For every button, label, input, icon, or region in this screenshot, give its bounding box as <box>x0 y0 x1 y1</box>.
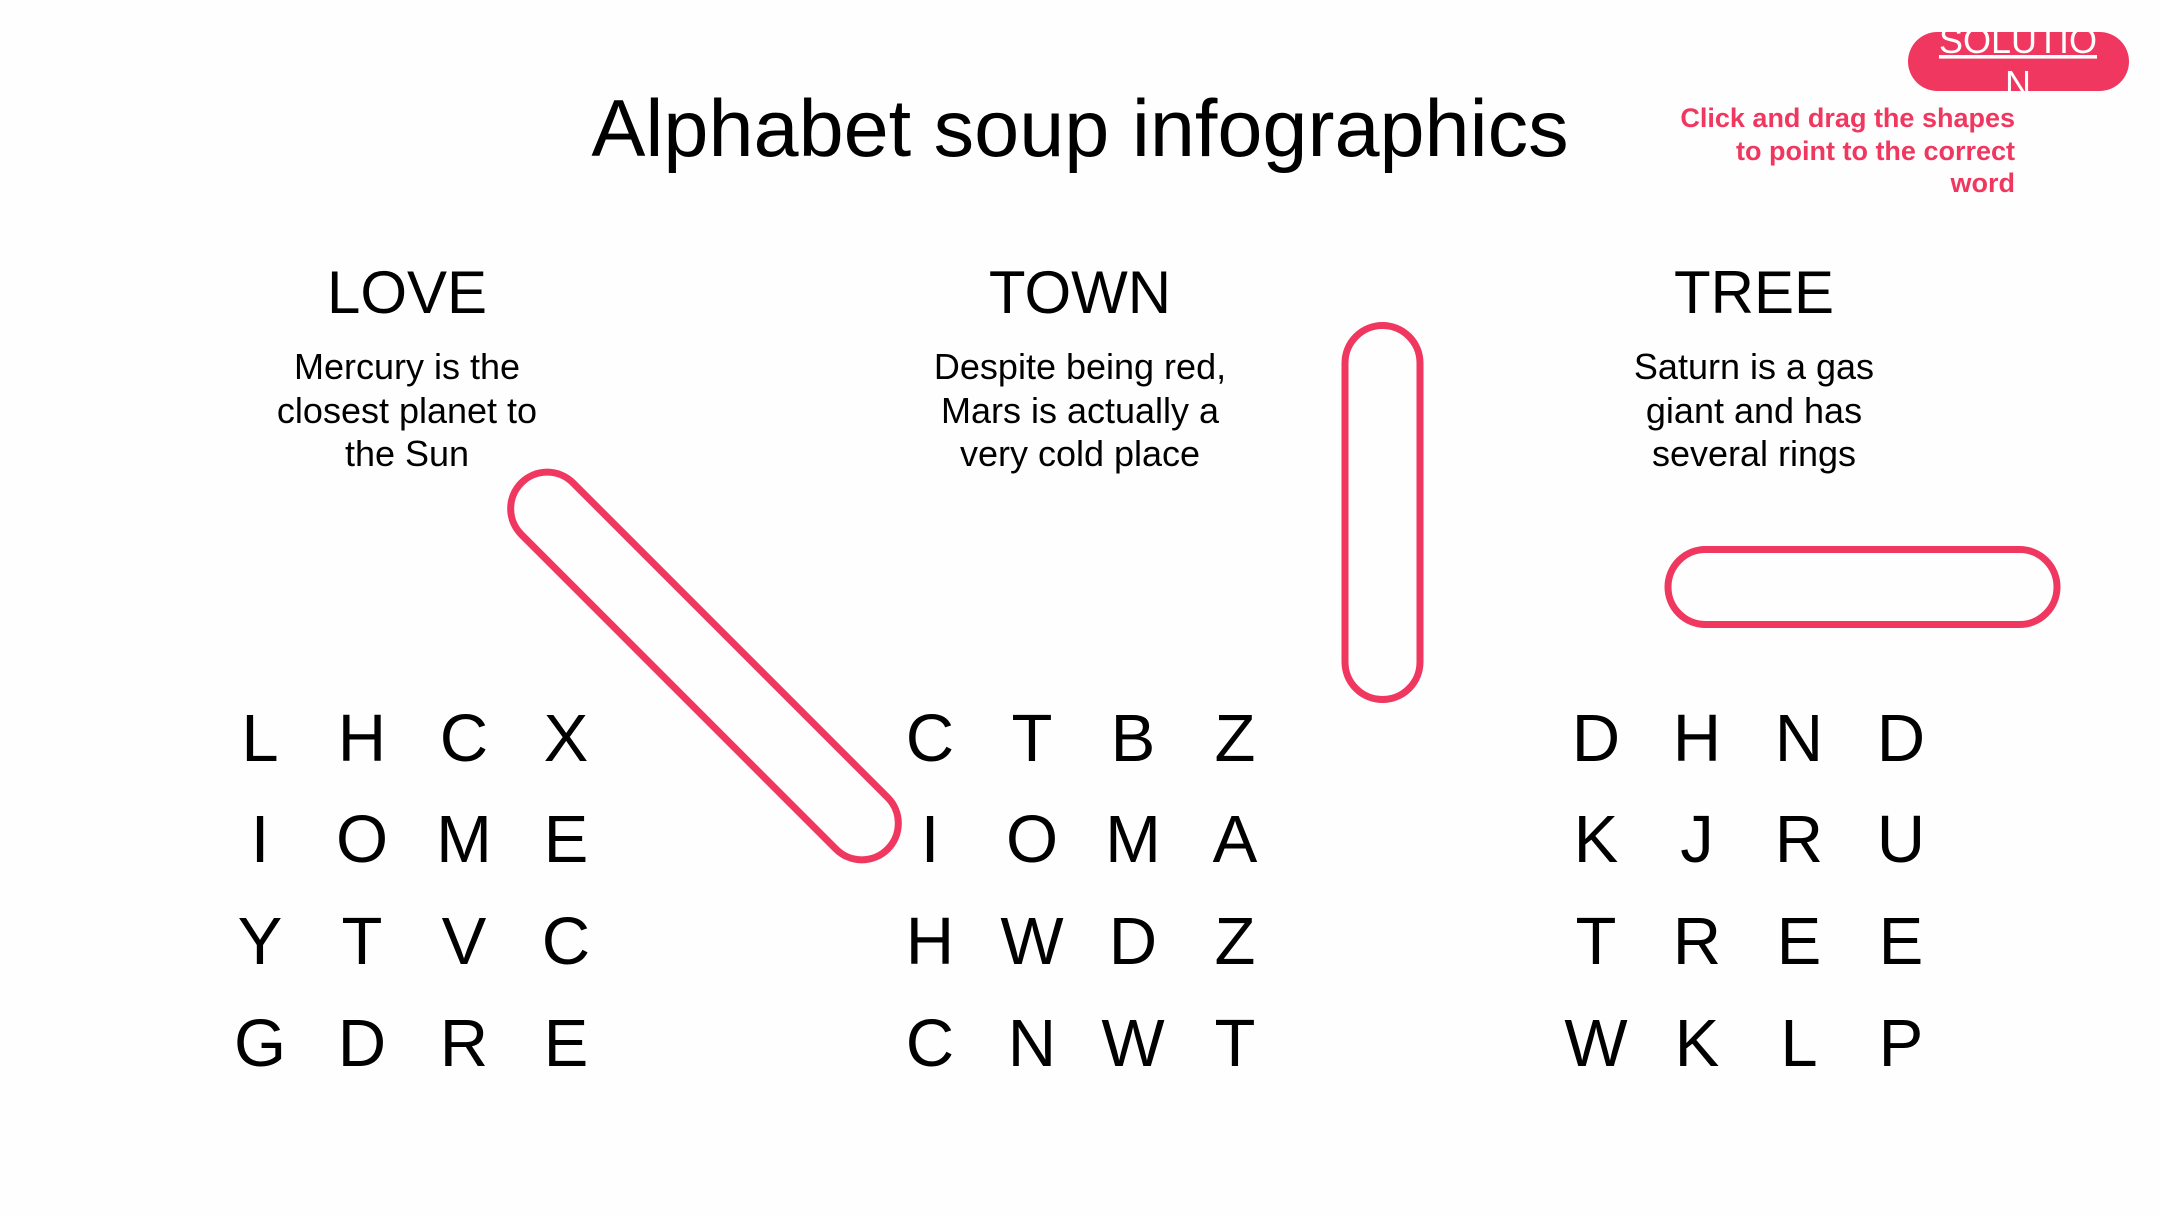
letter grid: tree: K <box>1675 1006 1719 1081</box>
letter grid: town: Z <box>1215 701 1255 776</box>
solution button: SOLUTIO <box>1939 20 2097 61</box>
letter grid: love: E <box>544 802 588 877</box>
panel: tree <box>1564 259 1925 1081</box>
letter grid: town: B <box>1111 701 1155 776</box>
letter grid: tree: P <box>1879 1006 1923 1081</box>
text block: love description: Mercury is the <box>294 346 520 387</box>
letter grid: love: I <box>251 802 269 877</box>
title: Alphabet soup infographics <box>591 84 1569 174</box>
letter grid: tree: H <box>1673 701 1721 776</box>
letter grid: town: C <box>906 1006 954 1081</box>
letter grid: love: G <box>234 1006 286 1081</box>
letter grid: love: X <box>544 701 588 776</box>
letter grid: tree: R <box>1673 904 1721 979</box>
letter grid: tree: R <box>1775 802 1823 877</box>
letter grid: tree: U <box>1877 802 1925 877</box>
text block: tree description <box>1634 346 1874 474</box>
letter grid: tree: E <box>1777 904 1821 979</box>
letter grid: love: M <box>436 802 492 877</box>
letter grid: love: R <box>440 1006 488 1081</box>
text block: town description: very cold place <box>960 433 1200 474</box>
letter grid: town: N <box>1008 1006 1056 1081</box>
letter grid: town: H <box>906 904 954 979</box>
text block: love description: the Sun <box>345 433 469 474</box>
text block: love description <box>277 346 537 474</box>
heading: tree: TREE <box>1674 259 1834 326</box>
letter grid: love: C <box>542 904 590 979</box>
heading: love: LOVE <box>327 259 487 326</box>
text block: tree description: Saturn is a gas <box>1634 346 1874 387</box>
letter grid: tree: T <box>1576 904 1616 979</box>
letter grid: love: L <box>241 701 279 776</box>
text block: town description <box>934 346 1226 474</box>
letter grid: love: H <box>338 701 386 776</box>
letter grid: love: D <box>338 1006 386 1081</box>
solution button: N <box>2005 63 2031 104</box>
instruction text: word <box>1950 168 2015 198</box>
draggable shape: horizontal pill <box>1668 550 2057 624</box>
heading: town: TOWN <box>989 259 1171 326</box>
panel: town <box>906 259 1258 1081</box>
letter grid: tree: D <box>1877 701 1925 776</box>
letter grid: tree: J <box>1680 802 1714 877</box>
solution button <box>1908 32 2129 91</box>
letter grid: town: I <box>921 802 939 877</box>
letter grid: town: T <box>1215 1006 1255 1081</box>
letter grid: love: V <box>442 904 487 979</box>
letter grid: town: A <box>1213 802 1258 877</box>
instruction text <box>1680 103 2015 198</box>
letter grid: love: Y <box>238 904 282 979</box>
letter grid: town: D <box>1109 904 1157 979</box>
letter grid: town: Z <box>1215 904 1255 979</box>
letter grid: love: E <box>544 1006 588 1081</box>
letter grid: town: O <box>1006 802 1058 877</box>
letter grid: town <box>906 701 1258 1081</box>
text block: town description: Despite being red, <box>934 346 1226 387</box>
letter grid: love: O <box>336 802 388 877</box>
letter grid: love: T <box>342 904 382 979</box>
letter grid: town: C <box>906 701 954 776</box>
letter grid: tree: K <box>1574 802 1618 877</box>
text block: tree description: giant and has <box>1646 390 1862 431</box>
letter grid: love: C <box>440 701 488 776</box>
draggable shape: diagonal pill <box>496 457 913 875</box>
letter grid: tree: L <box>1780 1006 1818 1081</box>
panel: love <box>234 259 590 1081</box>
letter grid: tree: E <box>1879 904 1923 979</box>
instruction text: to point to the correct <box>1736 136 2015 166</box>
text block: town description: Mars is actually a <box>941 390 1220 431</box>
draggable shape: vertical pill <box>1345 326 1420 700</box>
letter grid: love <box>234 701 590 1081</box>
text block: love description: closest planet to <box>277 390 537 431</box>
text block: tree description: several rings <box>1652 433 1856 474</box>
instruction text: Click and drag the shapes <box>1680 103 2015 133</box>
letter grid: town: W <box>1000 904 1064 979</box>
letter grid: tree: W <box>1564 1006 1628 1081</box>
letter grid: tree: D <box>1572 701 1620 776</box>
letter grid: town: W <box>1101 1006 1165 1081</box>
letter grid: tree: N <box>1775 701 1823 776</box>
letter grid: tree <box>1564 701 1925 1081</box>
letter grid: town: T <box>1012 701 1052 776</box>
letter grid: town: M <box>1105 802 1161 877</box>
